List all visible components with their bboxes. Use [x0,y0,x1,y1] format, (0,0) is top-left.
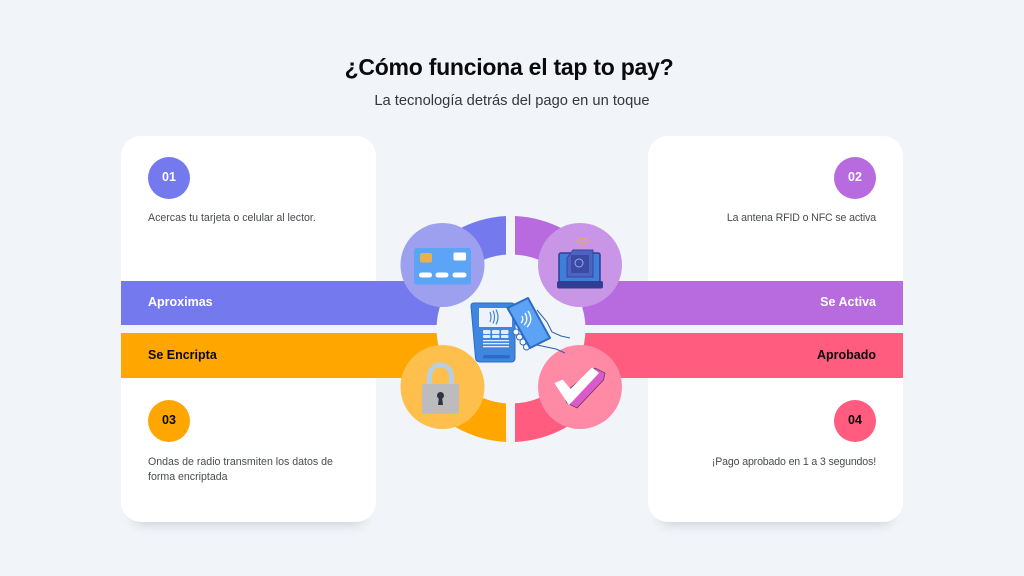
step number 01: 01 [162,170,176,184]
step number 02 [834,157,876,199]
panel: card top left [121,136,376,286]
panel: card bottom left [121,372,376,522]
step number 03 [148,400,190,442]
band: Se Encripta: Se Encripta [148,348,217,362]
band: Se Encripta [121,333,521,378]
step number 01 [148,157,190,199]
panel: card bottom right [648,372,903,522]
ring segment bottom right [515,329,602,442]
ring segment top left [420,216,506,329]
inner circle [436,254,586,404]
band: Se Activa: Se Activa [820,294,876,308]
icon: padlock [400,345,484,429]
band: Aproximas: Aproximas [148,294,213,308]
step text 03: Ondas de radio transmiten los datos de [148,456,333,468]
icon: laptop with NFC chip [538,223,622,307]
step text 04: ¡Pago aprobado en 1 a 3 segundos! [712,456,876,468]
icon: credit card [400,223,484,307]
step text 03 [148,456,333,483]
band: Aprobado: Aprobado [817,348,876,362]
step text 01: Acercas tu tarjeta o celular al lector. [148,212,316,224]
step number 04: 04 [848,413,862,427]
step number 03: 03 [162,413,176,427]
band: Aproximas [121,280,521,325]
title: ¿Cómo funciona el tap to pay? [345,54,673,80]
step text 03: forma encriptada [148,471,228,483]
ring segment bottom left [420,329,506,442]
step number 04 [834,400,876,442]
icon: payment terminal and phone [471,298,570,362]
step number 02: 02 [848,170,862,184]
step text 02: La antena RFID o NFC se activa [727,212,876,224]
band: Se Activa [503,280,903,325]
ring segment top right [515,216,602,329]
icon: check mark [538,345,622,429]
band: Aprobado [503,333,903,378]
subtitle: La tecnología detrás del pago en un toque [374,93,650,109]
panel: card top right [648,136,903,286]
